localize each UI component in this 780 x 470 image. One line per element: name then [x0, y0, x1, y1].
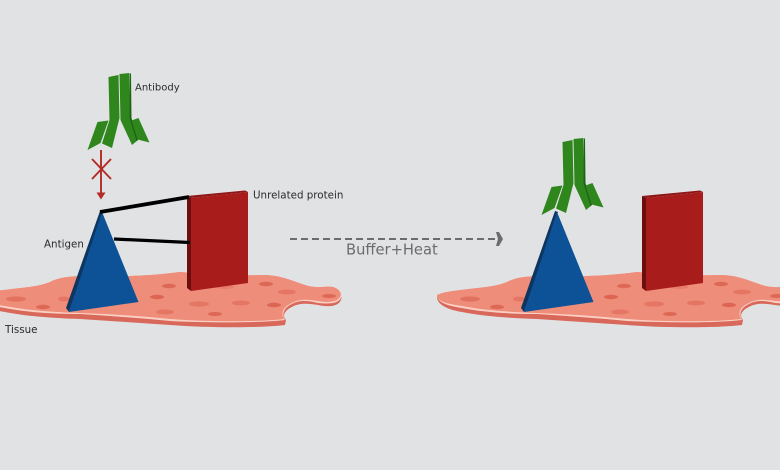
icon: antibody bound [542, 138, 604, 215]
label: tissue: Tissue [4, 324, 37, 336]
label: antigen: Antigen [44, 238, 84, 250]
label: antibody: Antibody [135, 82, 180, 94]
icon: blocked arrow [92, 150, 111, 200]
tissue: left [0, 272, 342, 327]
label: unrelated protein: Unrelated protein [253, 190, 343, 202]
label: buffer and heat: Buffer+Heat [346, 242, 438, 258]
crosslinks [100, 197, 190, 242]
tissue: right [437, 272, 780, 327]
block: unrelated protein [187, 190, 248, 291]
tissue spots [6, 282, 336, 316]
panel: after retrieval [437, 138, 780, 327]
tissue spots [460, 282, 780, 316]
arrow: process [290, 232, 503, 246]
triangle: antigen [66, 211, 138, 312]
icon: antibody [88, 73, 150, 150]
panel: before retrieval [0, 73, 342, 327]
block: unrelated protein released [642, 190, 703, 291]
triangle: antigen exposed [521, 211, 594, 312]
